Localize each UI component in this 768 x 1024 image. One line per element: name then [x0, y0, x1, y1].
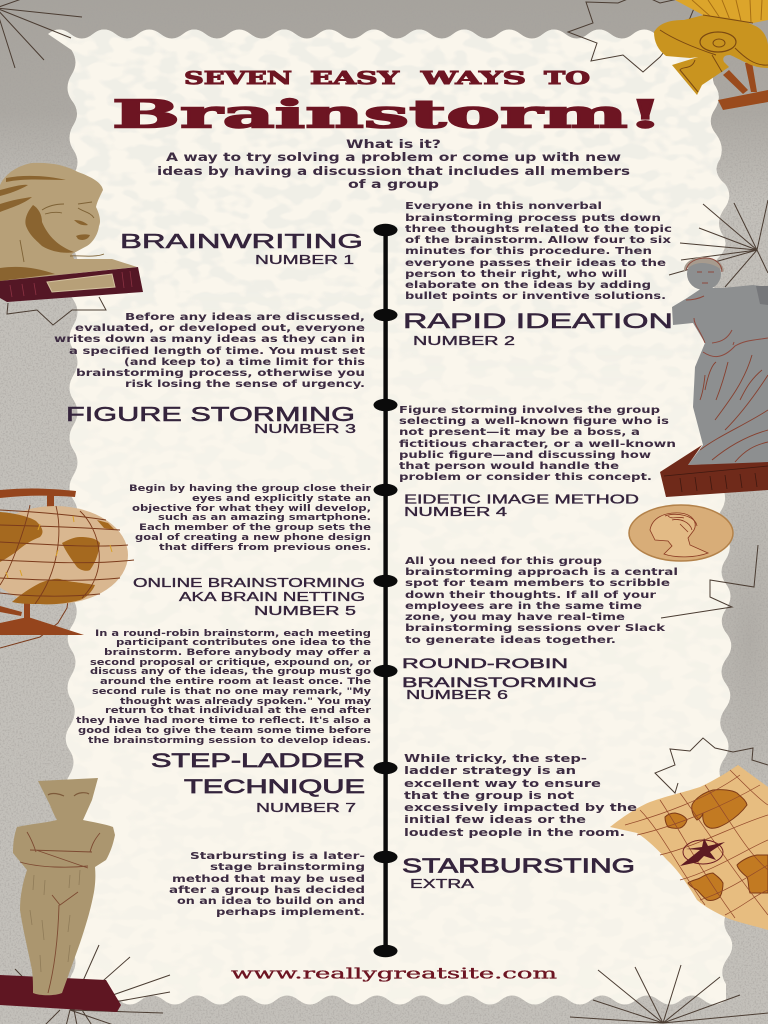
step 7: step-ladder description: ladder strategy is an	[404, 765, 576, 777]
step 5 heading: online brainstorming	[133, 576, 365, 618]
step 4 heading: eidetic image method	[404, 492, 639, 519]
step 2: rapid ideation description: evaluated, or developed out, everyone	[75, 323, 365, 334]
step 5 heading: online brainstorming: AKA BRAIN NETTING	[179, 590, 365, 604]
step 2: rapid ideation description: a specified length of time. You must set	[69, 346, 365, 357]
step 4: eidetic image description: Each member of the group sets the	[139, 523, 371, 533]
icon: idol figurine	[0, 778, 121, 1012]
star outline: right scribble	[661, 545, 758, 618]
step 5: online brainstorming description: All you need for this group	[405, 556, 602, 567]
step 7: step-ladder description	[404, 753, 637, 839]
step 3 heading: figure storming	[66, 403, 356, 436]
step 7: step-ladder description: excessively impacted by the	[404, 802, 637, 814]
step 6 heading: round-robin brainstorming: ROUND-ROBIN	[402, 655, 568, 671]
step 3: figure storming description: Figure storming involves the group	[399, 405, 660, 416]
step 1: brainwriting description: Everyone in this nonverbal	[405, 201, 602, 212]
step 8: starbursting description: Starbursting is a later-	[190, 851, 365, 862]
step 4: eidetic image description	[129, 484, 372, 553]
step 3: figure storming description: selecting a well-known figure who is	[399, 416, 669, 427]
step 5 heading: online brainstorming: ONLINE BRAINSTORMING	[133, 576, 365, 590]
step 3: figure storming description: public figure—and discussing how	[399, 450, 651, 461]
step 3: figure storming description	[399, 405, 676, 483]
step 5: online brainstorming description: employees are in the same time	[405, 601, 642, 612]
title: SEVEN	[184, 68, 292, 89]
step 4: eidetic image description: objective for what they will develop,	[132, 504, 371, 514]
step 2: rapid ideation description: writes down as many ideas as they can in	[54, 334, 365, 345]
step 2: rapid ideation description: brainstorming process, otherwise you	[76, 368, 365, 379]
step 2 heading: rapid ideation	[403, 310, 673, 348]
step 4 heading: eidetic image method: EIDETIC IMAGE METHOD	[404, 492, 639, 506]
icon: bust sculpture	[0, 163, 143, 302]
step 8: starbursting description: method that may be used	[172, 874, 365, 885]
step 5: online brainstorming description: spot for team members to scribble	[405, 578, 670, 589]
step 3 heading: figure storming: FIGURE STORMING	[66, 403, 355, 426]
step 5: online brainstorming description: down their thoughts. If all of your	[405, 590, 656, 601]
step 5: online brainstorming description: zone, you may have real-time	[405, 612, 625, 623]
step 3 heading: figure storming: NUMBER 3	[254, 422, 356, 436]
step 6: round-robin description	[76, 629, 372, 746]
step 6 heading: round-robin brainstorming	[402, 655, 597, 702]
step 6: round-robin description: they have had more time to reflect. It's also a	[76, 716, 371, 726]
step 8 heading: starbursting	[402, 854, 635, 891]
step 8: starbursting description: on an idea to build on and	[177, 896, 365, 907]
step 7 heading: step-ladder technique	[151, 751, 365, 815]
sunburst: bottom left	[15, 945, 170, 1024]
step 3: figure storming description: that person would handle the	[399, 461, 619, 472]
step 6: round-robin description: In a round-robin brainstorm, each meeting	[95, 629, 371, 639]
step 6: round-robin description: good idea to give the team some time before	[78, 726, 371, 736]
step 1 heading: brainwriting: BRAINWRITING	[120, 230, 363, 253]
step 8: starbursting description: perhaps implement.	[216, 907, 365, 918]
step 1: brainwriting description: bullet points or inventive solutions.	[405, 291, 666, 302]
step 6: round-robin description: brainstorm. Before anybody may offer a	[104, 648, 371, 658]
step 7: step-ladder description: loudest people in the room.	[404, 827, 625, 839]
step 6: round-robin description: return to that individual at the end after	[105, 706, 372, 716]
intro: what is it: A way to try solving a problem or come up with new	[166, 151, 621, 164]
step 6: round-robin description: thought was already spoken." You may	[120, 697, 371, 707]
step 1: brainwriting description: three thoughts related to the topic	[405, 224, 672, 235]
step 2: rapid ideation description: Before any ideas are discussed,	[125, 312, 365, 323]
icon: globe	[0, 488, 134, 648]
sunburst: bottom right	[570, 965, 768, 1023]
step 2: rapid ideation description	[54, 312, 365, 390]
icon: venus statue	[660, 257, 768, 497]
star outline: above map	[655, 738, 768, 793]
step 8: starbursting description	[169, 851, 365, 918]
step 6: round-robin description: second proposal or critique, expound on, or	[90, 658, 372, 668]
sunburst: right	[669, 200, 768, 287]
title: EASY	[310, 68, 401, 89]
step 7: step-ladder description: initial few ideas or the	[404, 814, 586, 826]
step 4 heading: eidetic image method: NUMBER 4	[404, 505, 507, 519]
website url: www.reallygreatsite.com	[231, 964, 557, 982]
step 2 heading: rapid ideation: NUMBER 2	[413, 334, 515, 348]
title: WAYS	[419, 68, 526, 89]
step 6: round-robin description: discuss any of the ideas, the group must go	[90, 667, 371, 677]
step 2: rapid ideation description: (and keep to) a time limit for this	[124, 357, 365, 368]
icon: coin	[629, 505, 733, 561]
step 4: eidetic image description: eyes and explicitly state an	[192, 494, 371, 504]
timeline	[374, 224, 398, 957]
step 2 heading: rapid ideation: RAPID IDEATION	[403, 310, 673, 333]
step 1: brainwriting description: person to their right, who will	[405, 269, 627, 280]
intro: what is it: What is it?	[346, 138, 441, 151]
step 7 heading: step-ladder technique: NUMBER 7	[256, 801, 356, 815]
step 4: eidetic image description: that differs from previous ones.	[159, 543, 371, 553]
step 8: starbursting description: after a group has decided	[169, 885, 365, 896]
step 1: brainwriting description: elaborate on the ideas by adding	[405, 280, 651, 291]
step 3: figure storming description: not present—it may be a boss, a	[399, 427, 640, 438]
icon: treasure map	[610, 765, 768, 930]
step 2: rapid ideation description: risk losing the sense of urgency.	[125, 379, 365, 390]
step 3: figure storming description: problem or consider this concept.	[399, 472, 652, 483]
step 4: eidetic image description: such as an amazing smartphone.	[158, 513, 371, 523]
step 7 heading: step-ladder technique: TECHNIQUE	[184, 777, 365, 798]
intro: what is it	[157, 138, 630, 191]
step 1: brainwriting description	[405, 201, 672, 302]
intro: what is it: of a group	[348, 178, 439, 191]
star outline: top right	[568, 0, 700, 72]
step 5: online brainstorming description: brainstorming approach is a central	[405, 567, 678, 578]
step 6 heading: round-robin brainstorming: NUMBER 6	[406, 688, 508, 702]
title: Brainstorm!	[112, 92, 663, 136]
step 7: step-ladder description: excellent way to ensure	[404, 778, 601, 790]
step 5: online brainstorming description: brainstorming sessions over Slack	[405, 623, 666, 634]
title	[112, 68, 663, 136]
title: TO	[544, 68, 590, 89]
step 1: brainwriting description: brainstorming process puts down	[405, 213, 661, 224]
icon: golden helmet	[654, 0, 768, 110]
step 1 heading: brainwriting	[120, 230, 363, 267]
step 1 heading: brainwriting: NUMBER 1	[255, 253, 354, 267]
step 1: brainwriting description: of the brainstorm. Allow four to six	[405, 235, 672, 246]
star outline: below bust	[7, 297, 106, 325]
step 8 heading: starbursting: STARBURSTING	[402, 854, 635, 878]
step 4: eidetic image description: Begin by having the group close their	[129, 484, 372, 494]
step 7: step-ladder description: While tricky, the step-	[404, 753, 587, 765]
step 4: eidetic image description: goal of creating a new phone design	[135, 533, 371, 543]
step 6: round-robin description: the brainstorming session to develop ideas.	[88, 736, 371, 746]
step 6: round-robin description: participant contributes one idea to the	[116, 638, 371, 648]
step 7: step-ladder description: that the group is not	[404, 790, 574, 802]
sunburst: top left	[0, 0, 82, 68]
step 6: round-robin description: around the entire room at least once. The	[100, 677, 371, 687]
step 6 heading: round-robin brainstorming: BRAINSTORMING	[402, 674, 597, 690]
step 8: starbursting description: stage brainstorming	[210, 862, 365, 873]
intro: what is it: ideas by having a discussion that includes all members	[157, 165, 630, 178]
step 6: round-robin description: second rule is that no one may remark, "My	[92, 687, 371, 697]
step 5: online brainstorming description: to generate ideas together.	[405, 635, 616, 646]
step 8 heading: starbursting: EXTRA	[410, 877, 475, 891]
step 1: brainwriting description: minutes for this procedure. Then	[405, 246, 652, 257]
step 3: figure storming description: fictitious character, or a well-known	[399, 439, 676, 450]
step 1: brainwriting description: everyone passes their ideas to the	[405, 258, 666, 269]
step 5: online brainstorming description	[405, 556, 678, 646]
step 5 heading: online brainstorming: NUMBER 5	[254, 604, 356, 618]
step 7 heading: step-ladder technique: STEP-LADDER	[151, 751, 365, 772]
